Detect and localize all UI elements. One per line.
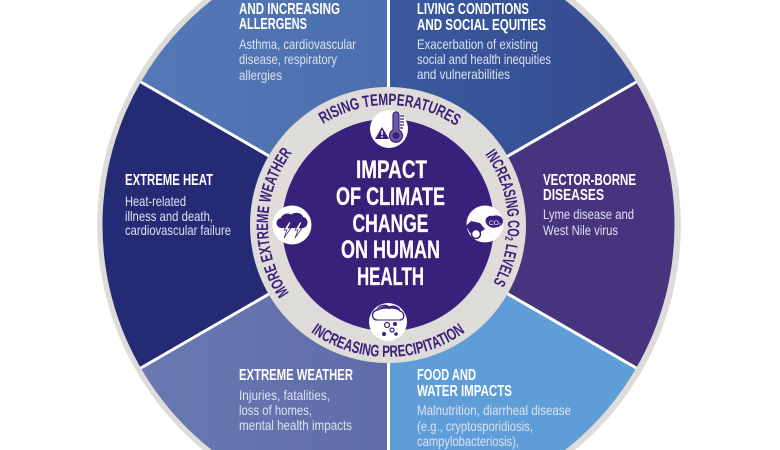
panel: living conditions sector (388, 0, 636, 225)
text: extreme heat: cardiovascular failure (125, 222, 231, 238)
icon: storm cloud with lightning (272, 206, 312, 244)
text: vector-borne diseases: VECTOR-BORNE (543, 172, 636, 189)
ring label: increasing CO2 levels: LEVELS (494, 244, 518, 287)
text: air quality: ALLERGENS (239, 16, 307, 33)
text: extreme weather: EXTREME WEATHER (239, 367, 353, 384)
text: living conditions (417, 1, 551, 82)
icon: cloud with precipitation (369, 303, 407, 341)
title (336, 156, 445, 291)
text: air quality: disease, respiratory (239, 51, 337, 67)
title: OF CLIMATE (336, 183, 445, 211)
text: extreme heat (125, 172, 231, 238)
panel: extreme heat sector (102, 82, 388, 368)
text: extreme heat: illness and death, (125, 208, 213, 224)
text: vector-borne diseases: West Nile virus (543, 222, 618, 238)
text: vector-borne diseases (543, 172, 636, 238)
text: extreme weather: Injuries, fatalities, (239, 387, 330, 403)
text: vector-borne diseases: DISEASES (543, 187, 604, 204)
text: air quality: Asthma, cardiovascular (239, 36, 356, 52)
text: food and water impacts: Malnutrition, diarrheal disease (417, 402, 571, 418)
ring label: increasing CO2 levels: INCREASING CO (486, 148, 520, 236)
text: air quality: allergies (239, 67, 282, 83)
ring label: increasing precipitation: INCREASING PRECIPITATION (311, 323, 464, 357)
text: living conditions: social and health inequities (417, 51, 551, 67)
text: extreme weather (239, 367, 353, 433)
icon: thermometer with warning triangle (370, 110, 408, 148)
ring label: rising temperatures: RISING TEMPERATURES (318, 94, 461, 125)
panel: extreme weather sector (141, 225, 388, 450)
text: living conditions: LIVING CONDITIONS (417, 1, 529, 18)
outer wheel (97, 0, 681, 450)
title: CHANGE (352, 210, 428, 238)
text: living conditions: Exacerbation of existing (417, 36, 538, 52)
text: extreme weather: mental health impacts (239, 417, 352, 433)
text: extreme heat: EXTREME HEAT (125, 172, 213, 189)
title: HEALTH (357, 263, 424, 291)
text: food and water impacts: (e.g., cryptosporidiosis, (417, 418, 533, 434)
panel: food and water sector (388, 225, 636, 450)
ring label: more extreme weather: MORE EXTREME WEATHER (256, 148, 292, 298)
ring label: increasing CO2 levels: 2 (505, 236, 513, 240)
panel: air quality sector (141, 0, 388, 225)
text: extreme heat: Heat-related (125, 193, 186, 209)
text: food and water impacts: campylobacteriosis), (417, 433, 519, 449)
icon: car exhaust CO2 cloud (466, 206, 504, 242)
panel: vector-borne sector (388, 82, 675, 368)
text: extreme weather: loss of homes, (239, 402, 312, 418)
text: vector-borne diseases: Lyme disease and (543, 206, 634, 222)
title: IMPACT (356, 156, 427, 184)
text: living conditions: and vulnerabilities (417, 66, 510, 82)
title: ON HUMAN (341, 236, 440, 264)
text: food and water impacts: FOOD AND (417, 367, 476, 384)
icon: car exhaust CO2 cloud: CO₂ (489, 220, 502, 227)
text: food and water impacts: WATER IMPACTS (417, 383, 512, 400)
grey ring (250, 87, 526, 363)
centre disc (282, 119, 494, 331)
text: living conditions: AND SOCIAL EQUITIES (417, 17, 546, 34)
text: air quality (239, 1, 356, 83)
text: air quality: AND INCREASING (239, 1, 340, 18)
text: food and water impacts (417, 367, 571, 449)
